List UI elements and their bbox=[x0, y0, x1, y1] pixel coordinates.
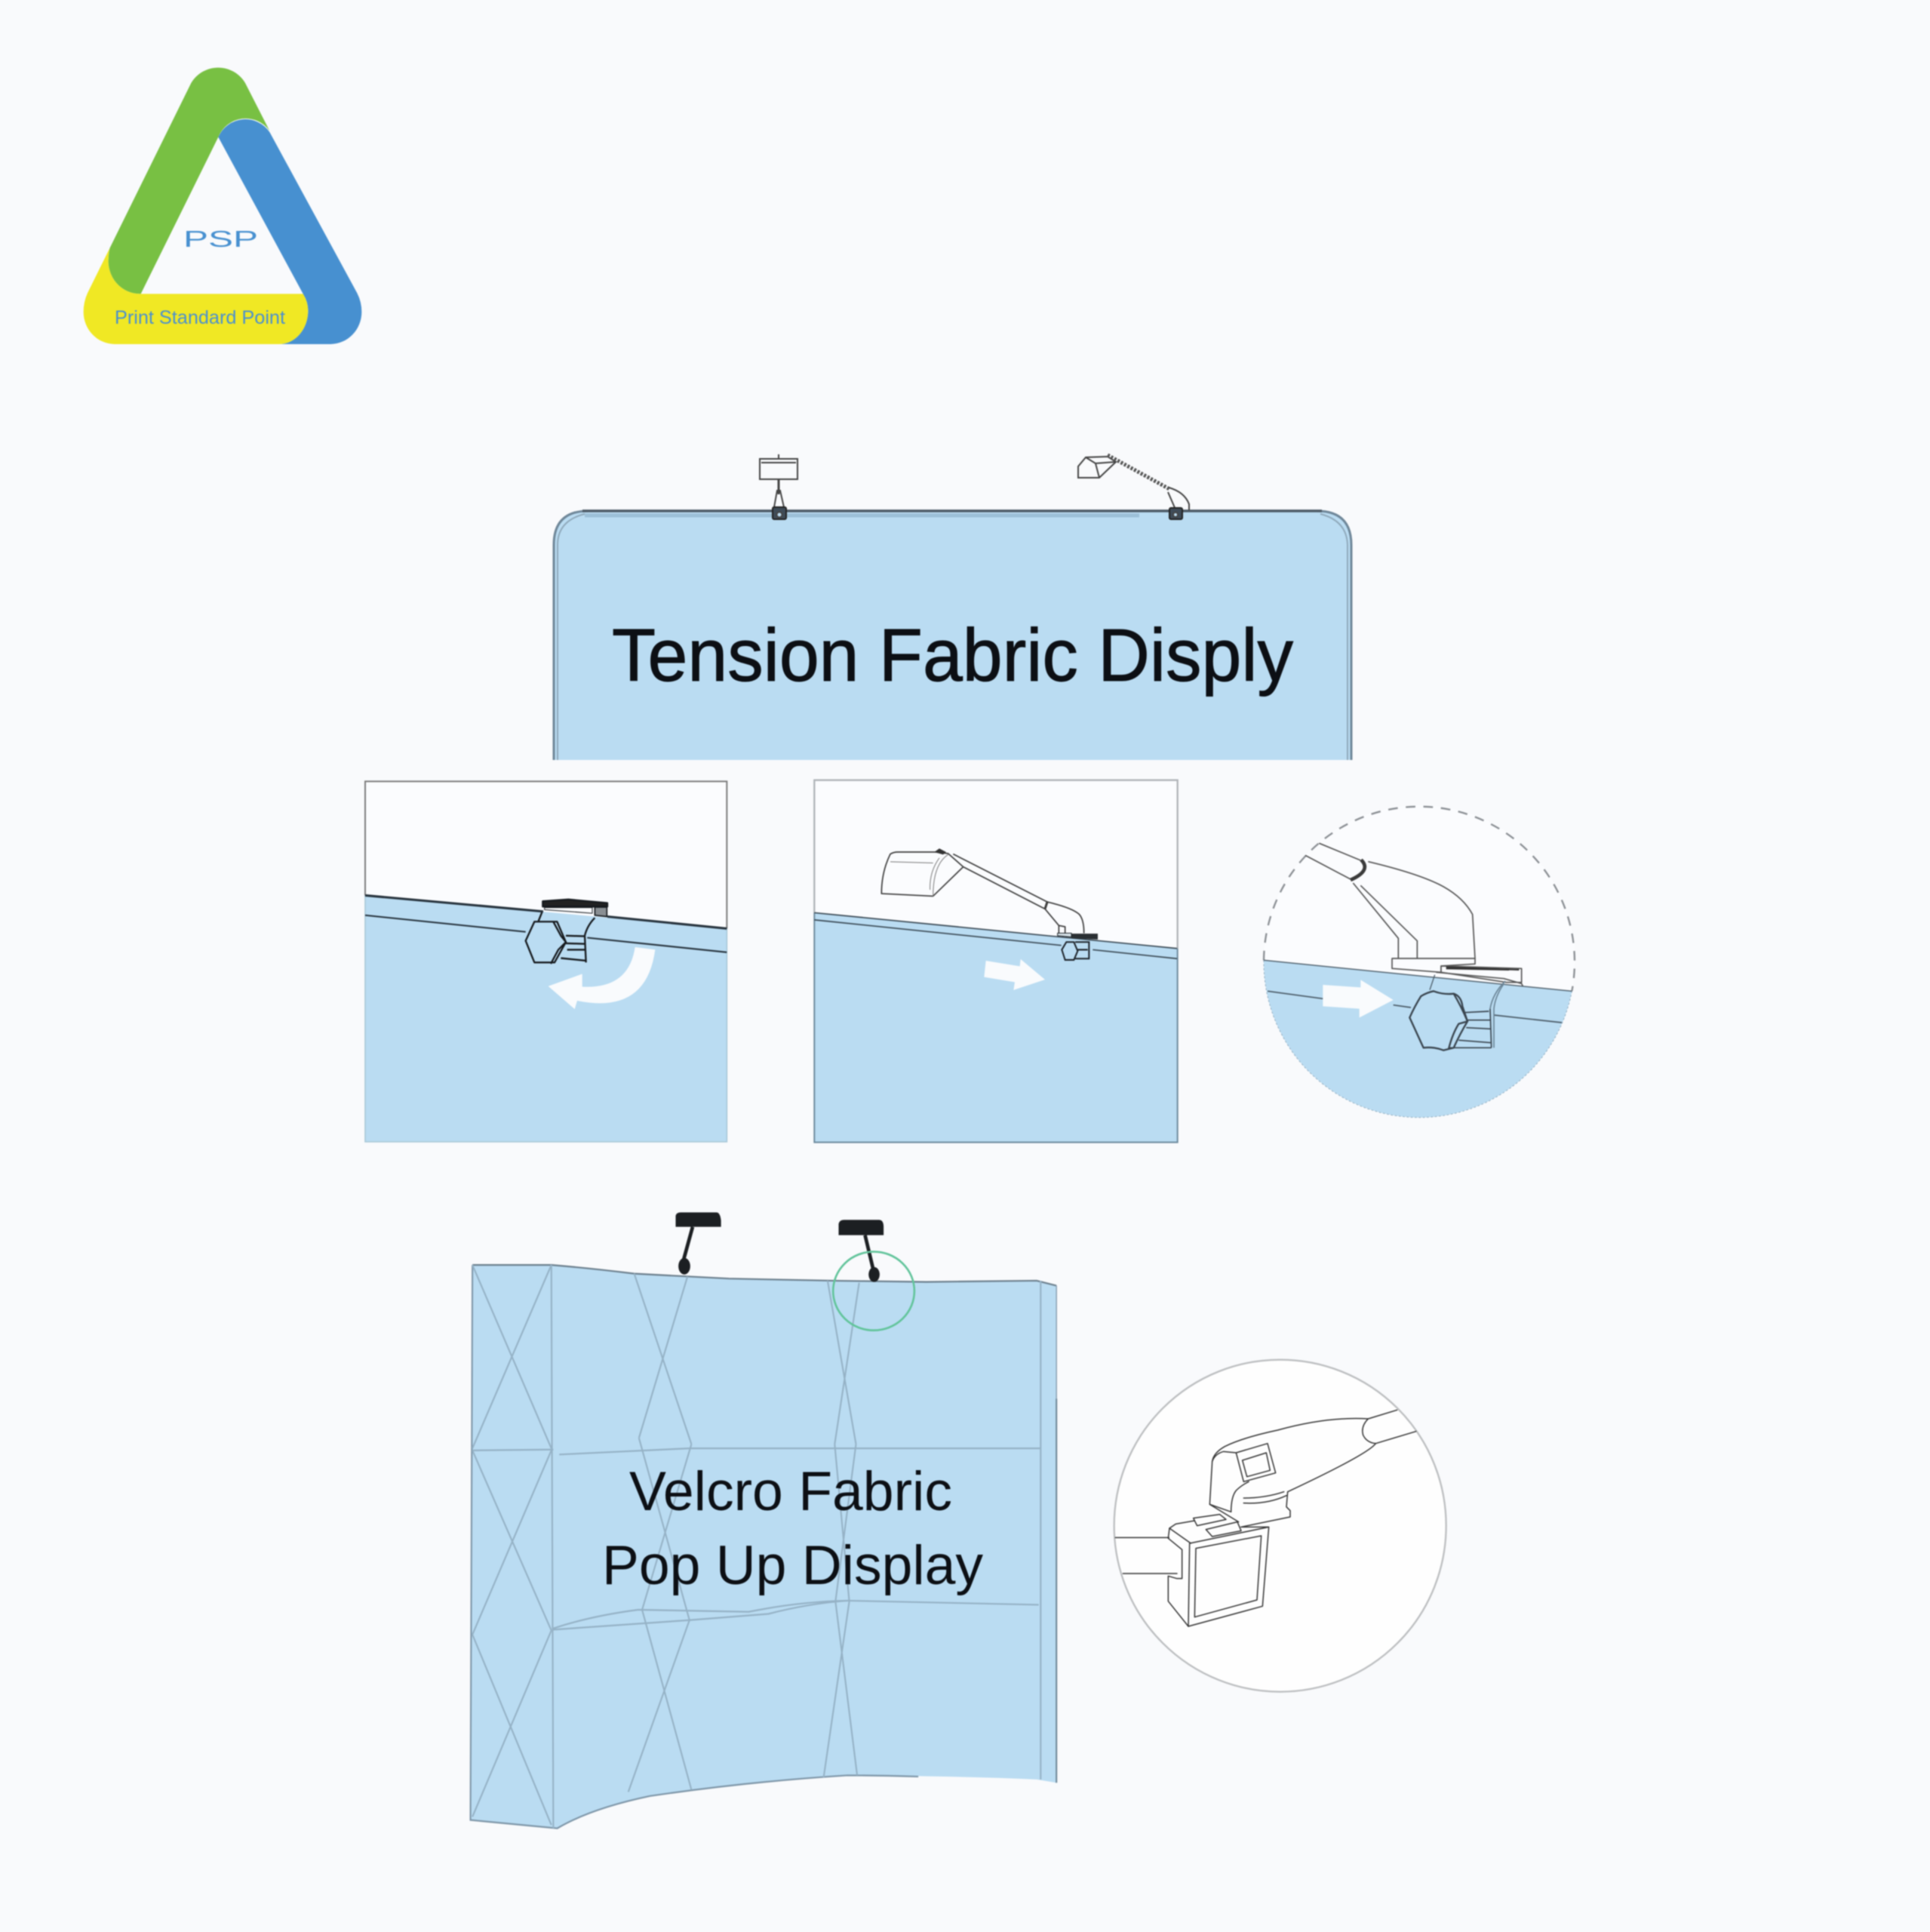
panel: circular clamp close-up bbox=[1264, 805, 1575, 1118]
logo triangle bands bbox=[84, 68, 361, 344]
fabric segment bbox=[1264, 960, 1572, 1118]
logo: PSP Print Standard Point bbox=[84, 68, 361, 344]
panel: velcro pop up display bbox=[471, 1212, 1056, 1829]
lamp two bbox=[838, 1220, 884, 1282]
lamp arm and base bbox=[1305, 843, 1523, 986]
bracket line drawing bbox=[1115, 1410, 1416, 1626]
display title line two: Pop Up Display bbox=[602, 1535, 983, 1596]
clamp and knob bbox=[1058, 933, 1098, 960]
lamp bbox=[881, 848, 1084, 933]
panel title: Tension Fabric Disply bbox=[612, 614, 1293, 697]
frame lines bbox=[1264, 960, 1572, 1023]
curved arrow bbox=[549, 947, 655, 1009]
fabric panel bbox=[554, 511, 1351, 760]
logo initials: PSP bbox=[183, 226, 258, 252]
arrow bbox=[1323, 980, 1394, 1017]
dashed outline bbox=[1264, 807, 1575, 991]
panel: circular lamp bracket close-up bbox=[1114, 1360, 1446, 1692]
knob bbox=[1409, 975, 1505, 1051]
fabric area bbox=[814, 912, 1177, 1143]
pop up wall bbox=[471, 1265, 1056, 1829]
slide arrow bbox=[984, 959, 1045, 990]
lamp one bbox=[675, 1212, 721, 1275]
lamp left bbox=[760, 454, 798, 519]
fabric area bbox=[365, 895, 727, 1142]
frame lines bbox=[814, 912, 1177, 958]
lamp right bbox=[1078, 455, 1189, 519]
panel: knob detail, rotate bbox=[365, 781, 727, 1142]
scissor frame lines bbox=[472, 1265, 1040, 1829]
panel: lamp mounted, slide bbox=[814, 780, 1178, 1143]
frame lines bbox=[365, 895, 727, 952]
clamp and knob bbox=[526, 900, 607, 964]
panel: tension fabric display bbox=[554, 454, 1351, 760]
green highlight circle bbox=[833, 1252, 914, 1331]
logo name: Print Standard Point bbox=[115, 307, 285, 328]
wall outline bbox=[472, 1265, 1056, 1286]
display title line one: Velcro Fabric bbox=[629, 1461, 952, 1522]
